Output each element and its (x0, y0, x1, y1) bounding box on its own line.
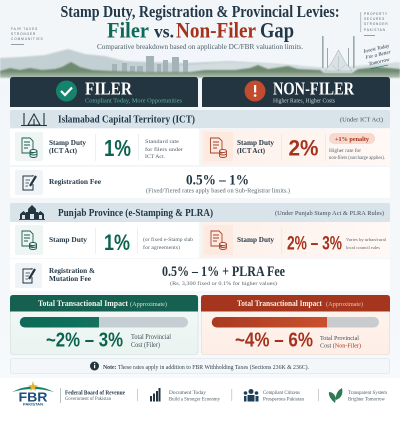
panel: Punjab registration and mutation fee: 0.5% – 1% + PLRA Fee (162, 264, 285, 280)
icon: people (244, 389, 258, 402)
right tagline: PAKISTAN (364, 28, 386, 32)
panel: non-filer header: NON-FILER (273, 78, 355, 98)
panel: Punjab registration and mutation fee: Registration & (49, 266, 95, 275)
panel: ICT heading band: (Under ICT Act) (340, 116, 383, 124)
icon: document (211, 231, 226, 250)
panel: ICT filer stamp duty: Standard rate (145, 139, 180, 145)
footer: Government of Pakistan (65, 397, 112, 402)
handwritten note (362, 43, 392, 69)
handwritten note: Invest Today (362, 43, 391, 55)
title: Filer (107, 18, 149, 42)
FBR logo (12, 381, 54, 406)
panel: ICT non-filer stamp duty: 2% (288, 136, 318, 160)
icon: leaf (329, 388, 342, 403)
panel: ICT heading band (10, 110, 390, 128)
handwritten note: For a Better (364, 49, 392, 61)
skyline illustration (0, 36, 400, 84)
right tagline (360, 12, 388, 36)
footer: Build a Stronger Economy (169, 398, 220, 402)
footer: Compliant Citizens (263, 391, 300, 396)
title: Non-Filer (176, 18, 256, 42)
panel: non-filer total impact: ~4% – 6% (235, 330, 313, 352)
panel: filer total impact: Total Transactional Impact (38, 299, 128, 308)
icon: document (22, 138, 37, 158)
panel: filer header: Compliant Today, More Opportunities (85, 98, 183, 104)
panel: non-filer total impact: Cost (Non-Filer) (320, 342, 361, 350)
panel: ICT filer stamp duty: (ICT Act) (49, 146, 77, 155)
title: Stamp Duty, Registration & Provincial Levies: (60, 2, 340, 21)
panel: filer header: FILER (85, 78, 133, 98)
panel: Punjab filer stamp duty: 1% (104, 230, 130, 255)
right tagline: PROPERTY (364, 12, 388, 16)
panel: Punjab filer stamp duty: for agreements) (143, 246, 180, 251)
panel: ICT non-filer stamp duty: non-filers (surcharge applies). (329, 156, 385, 161)
panel: Punjab heading band (10, 203, 390, 222)
footer: Brighter Tomorrow (348, 398, 385, 402)
note bar (10, 358, 390, 374)
panel: ICT non-filer stamp duty: Higher rate for (329, 149, 361, 154)
title (60, 2, 340, 42)
icon: document (210, 138, 226, 158)
footer: Prosperous Pakistan (263, 398, 305, 402)
note bar: Note: These rates apply in addition to FBR Withholding Taxes (Sections 236K & 236C). (103, 364, 309, 371)
panel: ICT registration fee: 0.5% – 1% (186, 172, 249, 188)
icon: bar chart (150, 388, 160, 402)
footer (0, 378, 400, 421)
right tagline: SECURES (364, 17, 385, 21)
left tagline (11, 27, 44, 45)
panel: ICT filer stamp duty (10, 129, 199, 165)
panel: Punjab filer stamp duty (10, 222, 199, 258)
left tagline: FAIR TAXES (11, 27, 38, 31)
panel: ICT non-filer stamp duty: (ICT Act) (237, 146, 265, 155)
panel: non-filer total impact: Total Provincial (320, 335, 359, 342)
title: vs. (154, 22, 174, 42)
panel: ICT registration fee: Registration Fee (49, 177, 102, 186)
panel: non-filer header (202, 77, 390, 107)
subtitle: Comparative breakdown based on applicable DC/FBR valuation limits. (97, 43, 303, 51)
left tagline: STRONGER (11, 32, 36, 36)
panel: non-filer total impact: Total Transactional Impact (237, 299, 322, 308)
panel: Punjab non-filer stamp duty: Stamp Duty (237, 235, 274, 244)
footer: Document Today (169, 391, 207, 396)
panel: ICT filer stamp duty: for filers under (145, 146, 183, 153)
panel: ICT non-filer stamp duty (201, 129, 390, 165)
icon: edit form (23, 268, 35, 283)
progress bar (212, 317, 379, 328)
panel: Punjab heading band: (Under Punjab Stamp Act & PLRA Rules) (275, 210, 384, 217)
icon: check (56, 80, 77, 102)
icon: document (22, 231, 36, 250)
panel: Punjab registration and mutation fee: Mutation Fee (49, 274, 92, 283)
handwritten note: Tomorrow (368, 57, 391, 67)
panel: Punjab non-filer stamp duty: local council rules (346, 245, 380, 250)
footer: Transparent System (348, 391, 387, 396)
panel: Punjab registration and mutation fee (10, 259, 390, 291)
panel: filer total impact: (Approximate) (130, 301, 167, 308)
progress bar (20, 317, 188, 328)
FBR logo: PAKISTAN (23, 402, 44, 406)
panel: Punjab non-filer stamp duty (201, 222, 390, 258)
icon: building (19, 205, 45, 220)
panel: filer total impact: Total Provincial (131, 334, 171, 341)
penalty badge (329, 133, 375, 144)
panel: ICT filer stamp duty: Stamp Duty (49, 138, 86, 147)
panel: Punjab heading band: Punjab Province (e-Stamping & PLRA) (58, 208, 213, 219)
penalty badge: +1% penalty (335, 137, 369, 143)
title: Gap (260, 18, 294, 42)
panel: ICT registration fee (10, 167, 390, 198)
icon: mosque (21, 113, 47, 126)
icon: exclamation (244, 80, 266, 102)
panel: filer total impact (10, 295, 198, 354)
panel: ICT non-filer stamp duty: Stamp Duty (237, 138, 274, 147)
panel: non-filer header: Higher Rates, Higher Costs (273, 98, 336, 104)
panel: filer header (10, 77, 198, 107)
left tagline: COMMUNITIES (11, 37, 44, 41)
icon: info (90, 362, 99, 370)
panel: Punjab filer stamp duty: Stamp Duty (49, 235, 87, 244)
footer: Federal Board of Revenue (65, 390, 125, 396)
panel: non-filer total impact (201, 295, 390, 354)
right tagline: STRONGER (364, 22, 388, 26)
icon: edit form (23, 175, 36, 190)
panel: Punjab non-filer stamp duty: 2% – 3% (287, 234, 342, 254)
panel: non-filer total impact: (Approximate) (326, 301, 363, 308)
panel: ICT filer stamp duty: ICT Act. (145, 154, 166, 160)
panel: Punjab filer stamp duty: (or fixed e-Stamp slab (143, 238, 194, 243)
panel: Punjab registration and mutation fee: (Rs. 3,300 fixed or 0.1% for higher values) (170, 280, 277, 287)
panel: Punjab non-filer stamp duty: Varies by urban/rural (346, 237, 387, 242)
panel: filer total impact: ~2% – 3% (46, 330, 123, 352)
panel: ICT registration fee: (Fixed/Tiered rates apply based on Sub-Registrar limits.) (146, 188, 290, 194)
FBR logo: FBR (18, 390, 48, 404)
panel: ICT heading band: Islamabad Capital Territory (ICT) (58, 114, 195, 126)
panel: ICT filer stamp duty: 1% (104, 135, 131, 161)
panel: filer total impact: Cost (Filer) (131, 342, 160, 349)
